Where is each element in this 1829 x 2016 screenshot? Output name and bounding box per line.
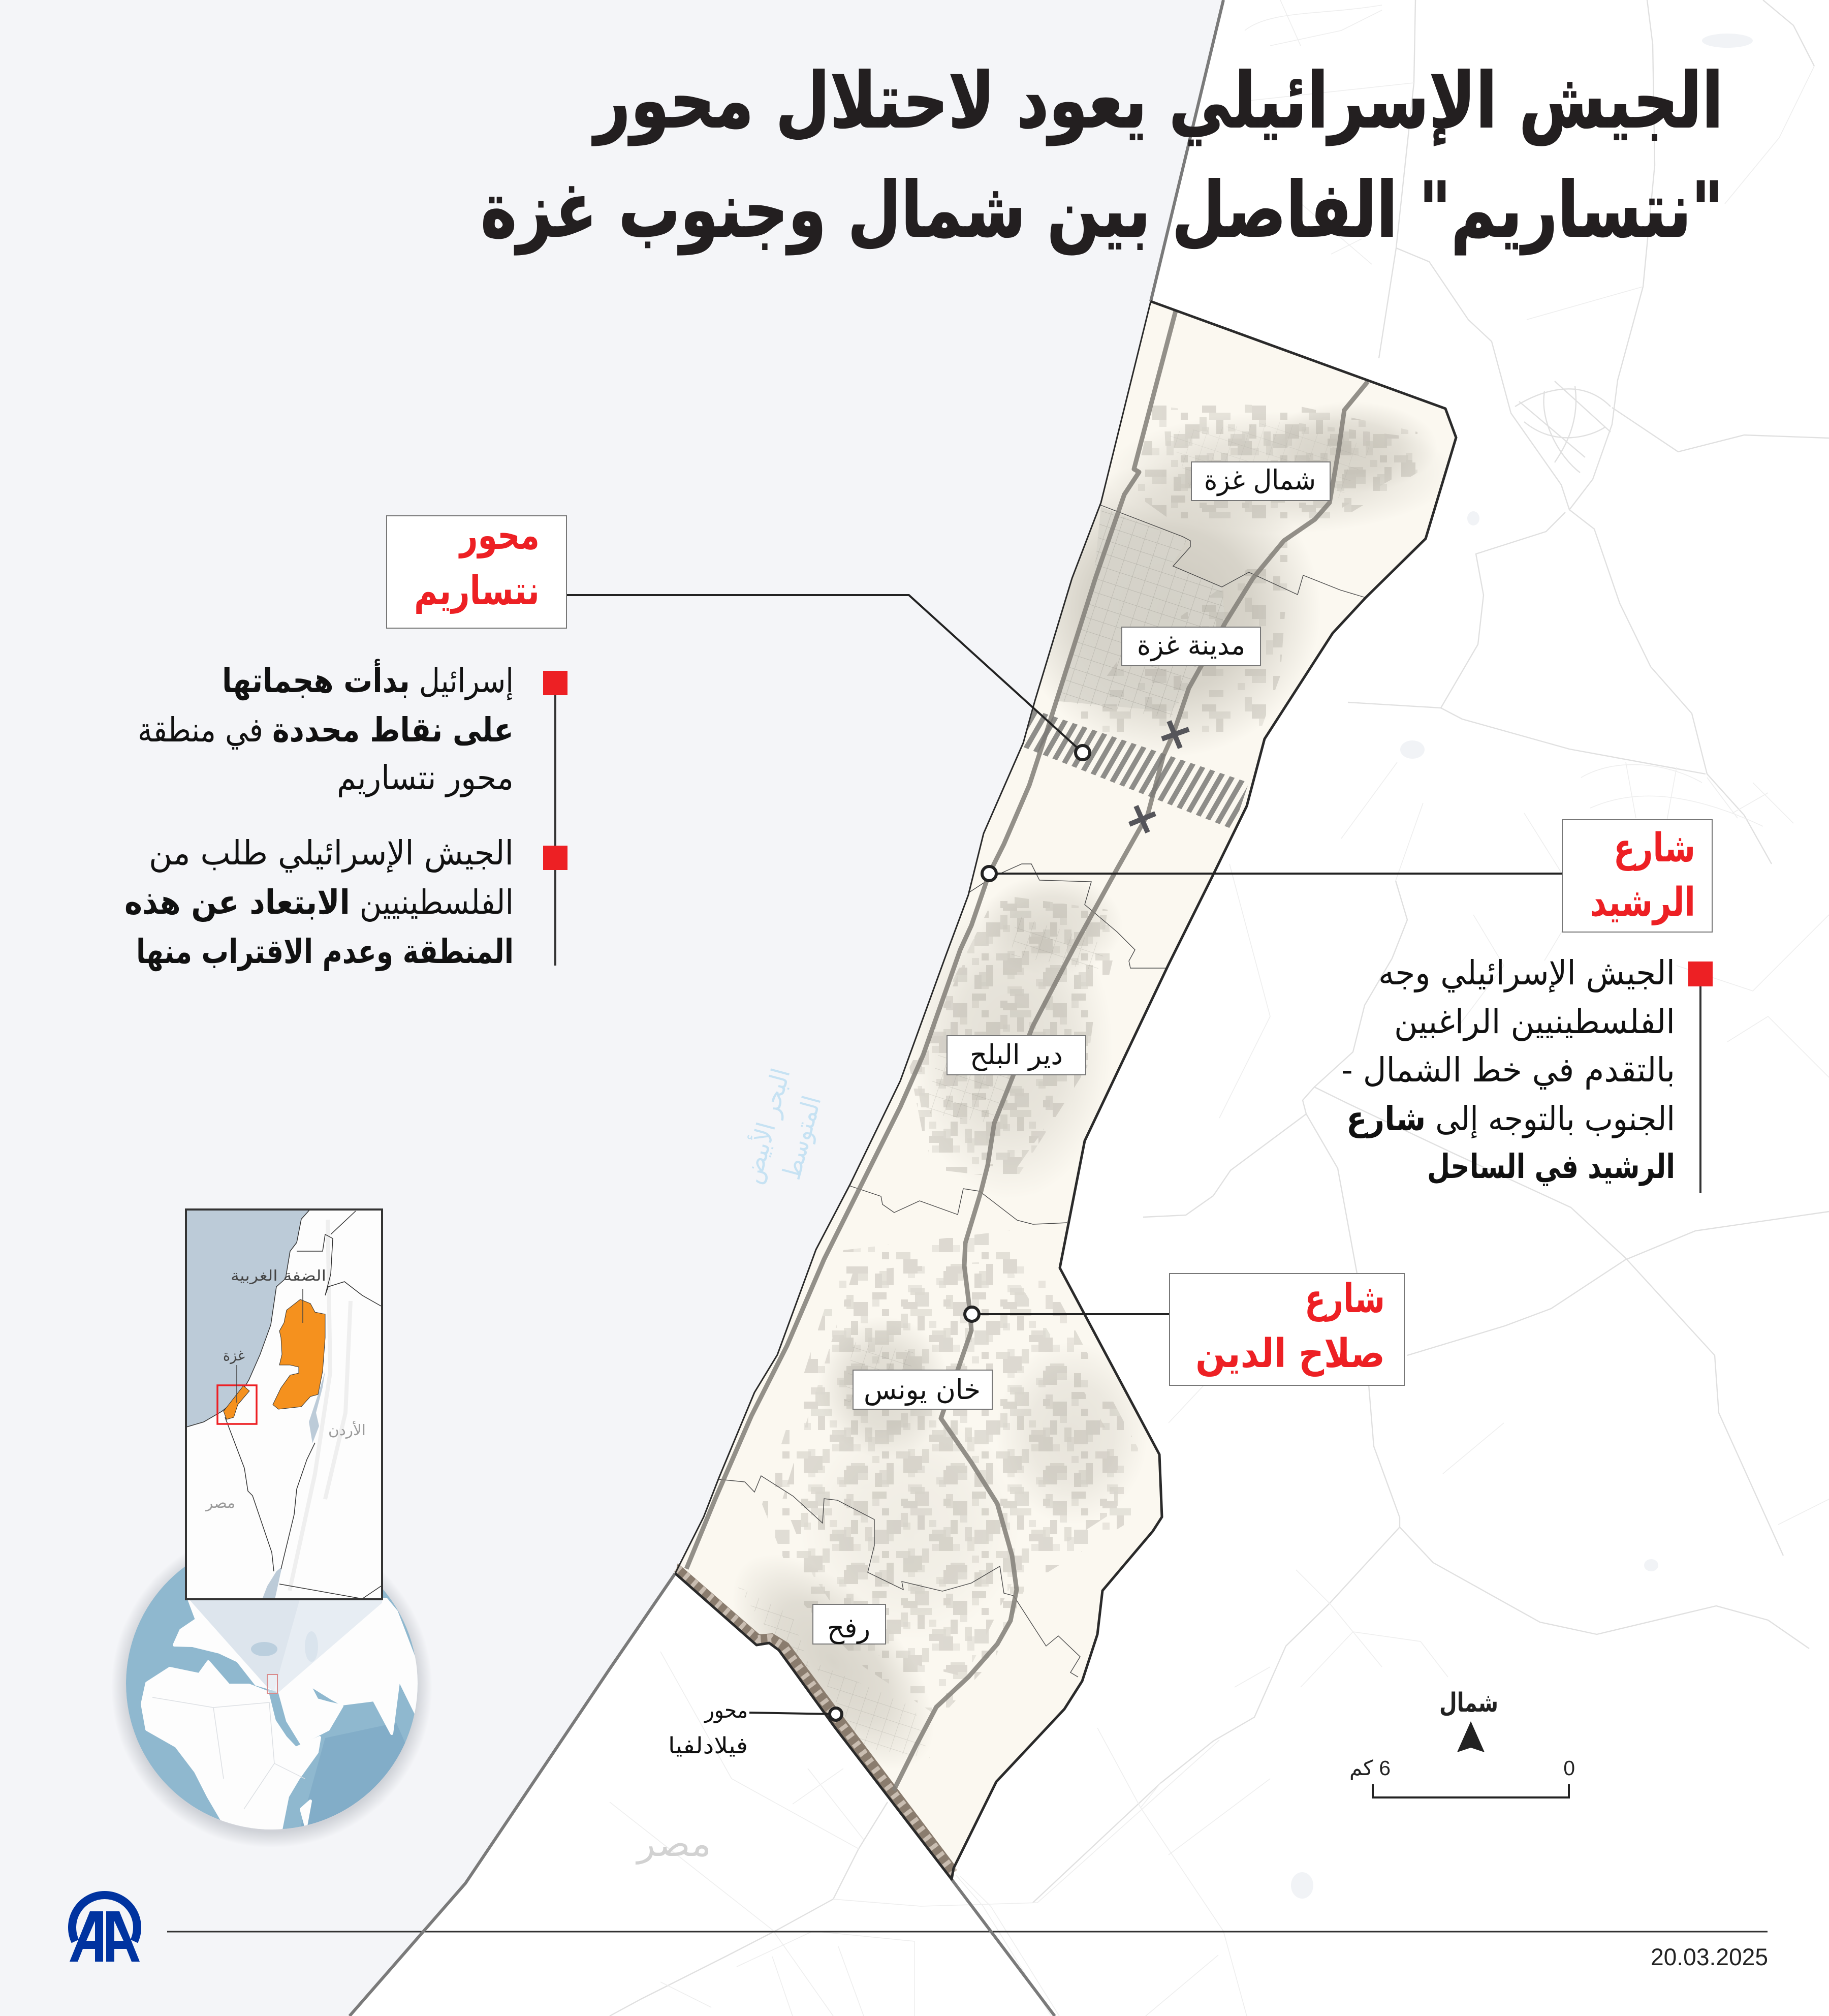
place label: Rafah: رفح — [827, 1612, 870, 1645]
place label: Rafah — [813, 1604, 886, 1645]
municipal boundary lines — [719, 505, 1366, 1677]
urban areas — [696, 401, 1453, 1804]
place label: Deir al-Balah: دير البلح — [970, 1039, 1063, 1071]
Gaza border outlines — [675, 301, 1456, 1879]
label box: Al-Rashid: شارع — [1614, 825, 1695, 871]
closure marks on Salah al-Din road — [1129, 721, 1189, 832]
callout: Philadelphi corridor — [668, 1697, 842, 1759]
Netzarim corridor hatch — [1023, 709, 1249, 829]
callout: Salah al-Din street — [965, 1274, 1404, 1385]
Mediterranean Sea label: البحر الأبيض — [736, 1065, 796, 1187]
label box: Al-Rashid: الرشيد — [1590, 880, 1695, 925]
callout: Netzarim — [387, 513, 1090, 760]
place label: Gaza City — [1122, 627, 1260, 666]
callout: Philadelphi corridor: محور — [704, 1697, 748, 1723]
text block: Al-Rashid notes: الجنوب بالتوجه إلى شارع — [1346, 1099, 1675, 1139]
AA logo — [70, 1895, 140, 1962]
Mediterranean Sea label — [736, 1065, 827, 1187]
coastlines outside Gaza and southern border — [350, 0, 1223, 2016]
label box: Salah al-Din: شارع — [1305, 1276, 1385, 1322]
sea in inset — [186, 1209, 310, 1427]
inset labels: مصر — [205, 1494, 235, 1511]
place label: North Gaza: شمال غزة — [1204, 464, 1316, 496]
water patches — [1291, 34, 1753, 1899]
text block: Netzarim notes: إسرائيل بدأت هجماتها — [222, 659, 514, 701]
Egypt label: مصر — [636, 1823, 711, 1865]
text block: Al-Rashid notes: بالتقدم في خط الشمال - — [1341, 1050, 1675, 1090]
place label: Khan Younis — [853, 1370, 992, 1409]
marker: Netzarim — [1076, 746, 1090, 760]
text block: Netzarim notes: على نقاط محددة في منطقة — [138, 710, 514, 750]
leader line: Al-Rashid — [989, 873, 1562, 875]
text block: Netzarim notes: محور نتساريم — [337, 758, 514, 797]
date: 20.03.2025 — [1651, 1943, 1768, 1970]
scale bar: 6 كم — [1349, 1756, 1391, 1780]
label box: Al-Rashid — [1562, 820, 1712, 932]
text block: Al-Rashid notes: الرشيد في الساحل — [1427, 1147, 1675, 1186]
inset location map — [186, 1209, 382, 1599]
globe locator — [115, 1557, 429, 1844]
label box: Netzarim: محور — [458, 513, 540, 559]
Red Sea gulf and Dead Sea — [262, 1567, 282, 1599]
Philadelphi corridor band — [675, 1563, 956, 1879]
north arrow: شمال — [1439, 1688, 1498, 1718]
terrain shading — [290, 1220, 351, 1591]
inset labels: غزة — [223, 1347, 245, 1364]
text block: Netzarim notes: المنطقة وعدم الاقتراب منها — [136, 932, 514, 972]
callout: Al-Rashid street — [982, 820, 1712, 932]
inset labels: الضفة الغربية — [231, 1267, 326, 1284]
West Bank shape — [273, 1299, 325, 1409]
place label: Gaza City: مدينة غزة — [1137, 629, 1245, 661]
footer rule over land — [167, 1931, 1768, 1932]
sea — [0, 0, 1223, 2016]
marker: Al-Rashid — [982, 866, 996, 881]
label box: Salah al-Din — [1170, 1274, 1404, 1385]
borders in inset — [225, 1211, 381, 1599]
inset labels: الأردن — [328, 1420, 366, 1439]
place label: Deir al-Balah — [947, 1036, 1086, 1075]
road network on surrounding land — [610, 0, 1829, 2016]
Salah al-Din road — [894, 382, 1368, 1790]
leader line: Netzarim — [566, 595, 1083, 753]
label box: Salah al-Din: صلاح الدين — [1195, 1331, 1385, 1377]
text block: Al-Rashid notes: الفلسطينيين الراغبين — [1394, 1002, 1675, 1041]
label box: Netzarim — [387, 513, 566, 628]
locator rectangle — [217, 1385, 257, 1424]
leader line: Salah al-Din — [972, 1313, 1170, 1315]
north arrow — [1439, 1688, 1498, 1752]
callout: Philadelphi corridor: فيلادلفيا — [668, 1733, 748, 1759]
Gaza shape — [224, 1386, 249, 1419]
text block: Al-Rashid notes: الجيش الإسرائيلي وجه — [1378, 953, 1675, 993]
text block: Al-Rashid notes — [1341, 953, 1713, 1193]
title — [481, 57, 1723, 255]
place label: Khan Younis: خان يونس — [864, 1374, 981, 1406]
label box: Netzarim: نتساريم — [414, 568, 540, 614]
scale bar: 0 — [1563, 1756, 1575, 1780]
scale bar — [1349, 1756, 1575, 1797]
inset labels — [205, 1267, 366, 1511]
Gaza Strip territory — [675, 301, 1456, 1879]
text block: Netzarim notes: الفلسطينيين الابتعاد عن هذه — [124, 883, 514, 922]
Mediterranean Sea label: المتوسط — [776, 1093, 827, 1183]
Al-Rashid road — [686, 311, 1176, 1569]
text block: Netzarim notes — [124, 659, 567, 972]
marker: Salah al-Din — [965, 1307, 979, 1321]
text block: Netzarim notes: الجيش الإسرائيلي طلب من — [149, 833, 514, 873]
